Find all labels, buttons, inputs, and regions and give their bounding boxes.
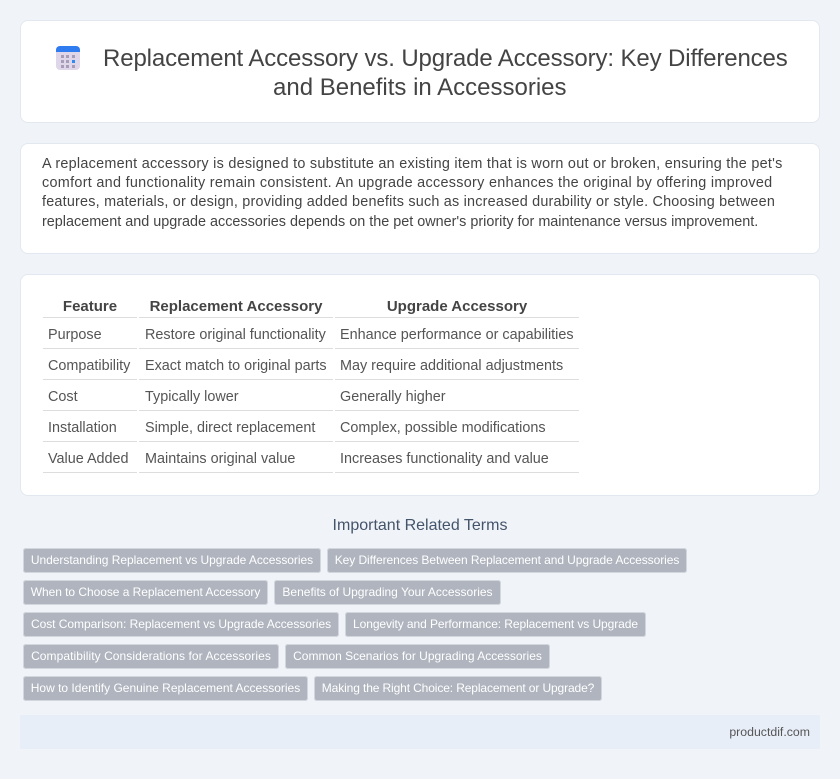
title bbox=[103, 45, 788, 101]
comparison table: Replacement Accessory bbox=[150, 298, 322, 315]
comparison table bbox=[43, 298, 579, 473]
title: Replacement Accessory vs. Upgrade Accessory: Key Differences bbox=[103, 45, 788, 72]
comparison table: Increases functionality and value bbox=[340, 451, 549, 467]
comparison table: Enhance performance or capabilities bbox=[340, 327, 574, 343]
footer bbox=[20, 715, 820, 749]
panel: description bbox=[20, 143, 820, 254]
comparison table: Maintains original value bbox=[145, 451, 295, 467]
comparison table: Exact match to original parts bbox=[145, 358, 327, 374]
related term tags: Understanding Replacement vs Upgrade Accessories bbox=[31, 553, 313, 567]
related term tags: Longevity and Performance: Replacement vs Upgrade bbox=[353, 617, 638, 631]
related term tags: Cost Comparison: Replacement vs Upgrade Accessories bbox=[31, 617, 331, 631]
text block: description: replacement and upgrade accessories depends on the pet owner's priority for maintenance versus improvement. bbox=[42, 214, 758, 230]
related term tags: Making the Right Choice: Replacement or Upgrade? bbox=[322, 681, 594, 695]
text block: description: features, materials, or design, providing added benefits such as increased durability or style. Choosing between bbox=[42, 194, 775, 210]
related term tags: How to Identify Genuine Replacement Accessories bbox=[31, 681, 300, 695]
panel: header bbox=[20, 20, 820, 123]
icon: calendar bbox=[56, 46, 80, 70]
text block: description: A replacement accessory is designed to substitute an existing item that is worn out or broken, ensuring the pet's bbox=[42, 156, 783, 172]
related term tags: Key Differences Between Replacement and Upgrade Accessories bbox=[335, 553, 679, 567]
comparison table: Feature bbox=[63, 298, 117, 315]
comparison table: Simple, direct replacement bbox=[145, 420, 315, 436]
comparison table: Purpose bbox=[48, 327, 102, 343]
related term tags: Benefits of Upgrading Your Accessories bbox=[282, 585, 493, 599]
text block: description bbox=[42, 156, 783, 230]
comparison table: Value Added bbox=[48, 451, 129, 467]
related term tags: Common Scenarios for Upgrading Accessories bbox=[293, 649, 542, 663]
panel: comparison table bbox=[20, 274, 820, 496]
comparison table: Cost bbox=[48, 389, 78, 405]
title: and Benefits in Accessories bbox=[273, 74, 566, 101]
comparison table: Generally higher bbox=[340, 389, 446, 405]
related term tags: When to Choose a Replacement Accessory bbox=[31, 585, 260, 599]
text block: description: comfort and functionality remain consistent. An upgrade accessory enhances the original by offering improved bbox=[42, 175, 772, 191]
comparison table: Upgrade Accessory bbox=[387, 298, 527, 315]
comparison table: Restore original functionality bbox=[145, 327, 326, 343]
footer source: productdif.com bbox=[729, 725, 810, 739]
comparison table: Complex, possible modifications bbox=[340, 420, 546, 436]
comparison table: Compatibility bbox=[48, 358, 130, 374]
related term tags: Compatibility Considerations for Accessories bbox=[31, 649, 271, 663]
related term tags bbox=[23, 548, 687, 701]
comparison table: Typically lower bbox=[145, 389, 239, 405]
comparison table: May require additional adjustments bbox=[340, 358, 563, 374]
heading: related terms: Important Related Terms bbox=[333, 517, 507, 534]
comparison table: Installation bbox=[48, 420, 117, 436]
